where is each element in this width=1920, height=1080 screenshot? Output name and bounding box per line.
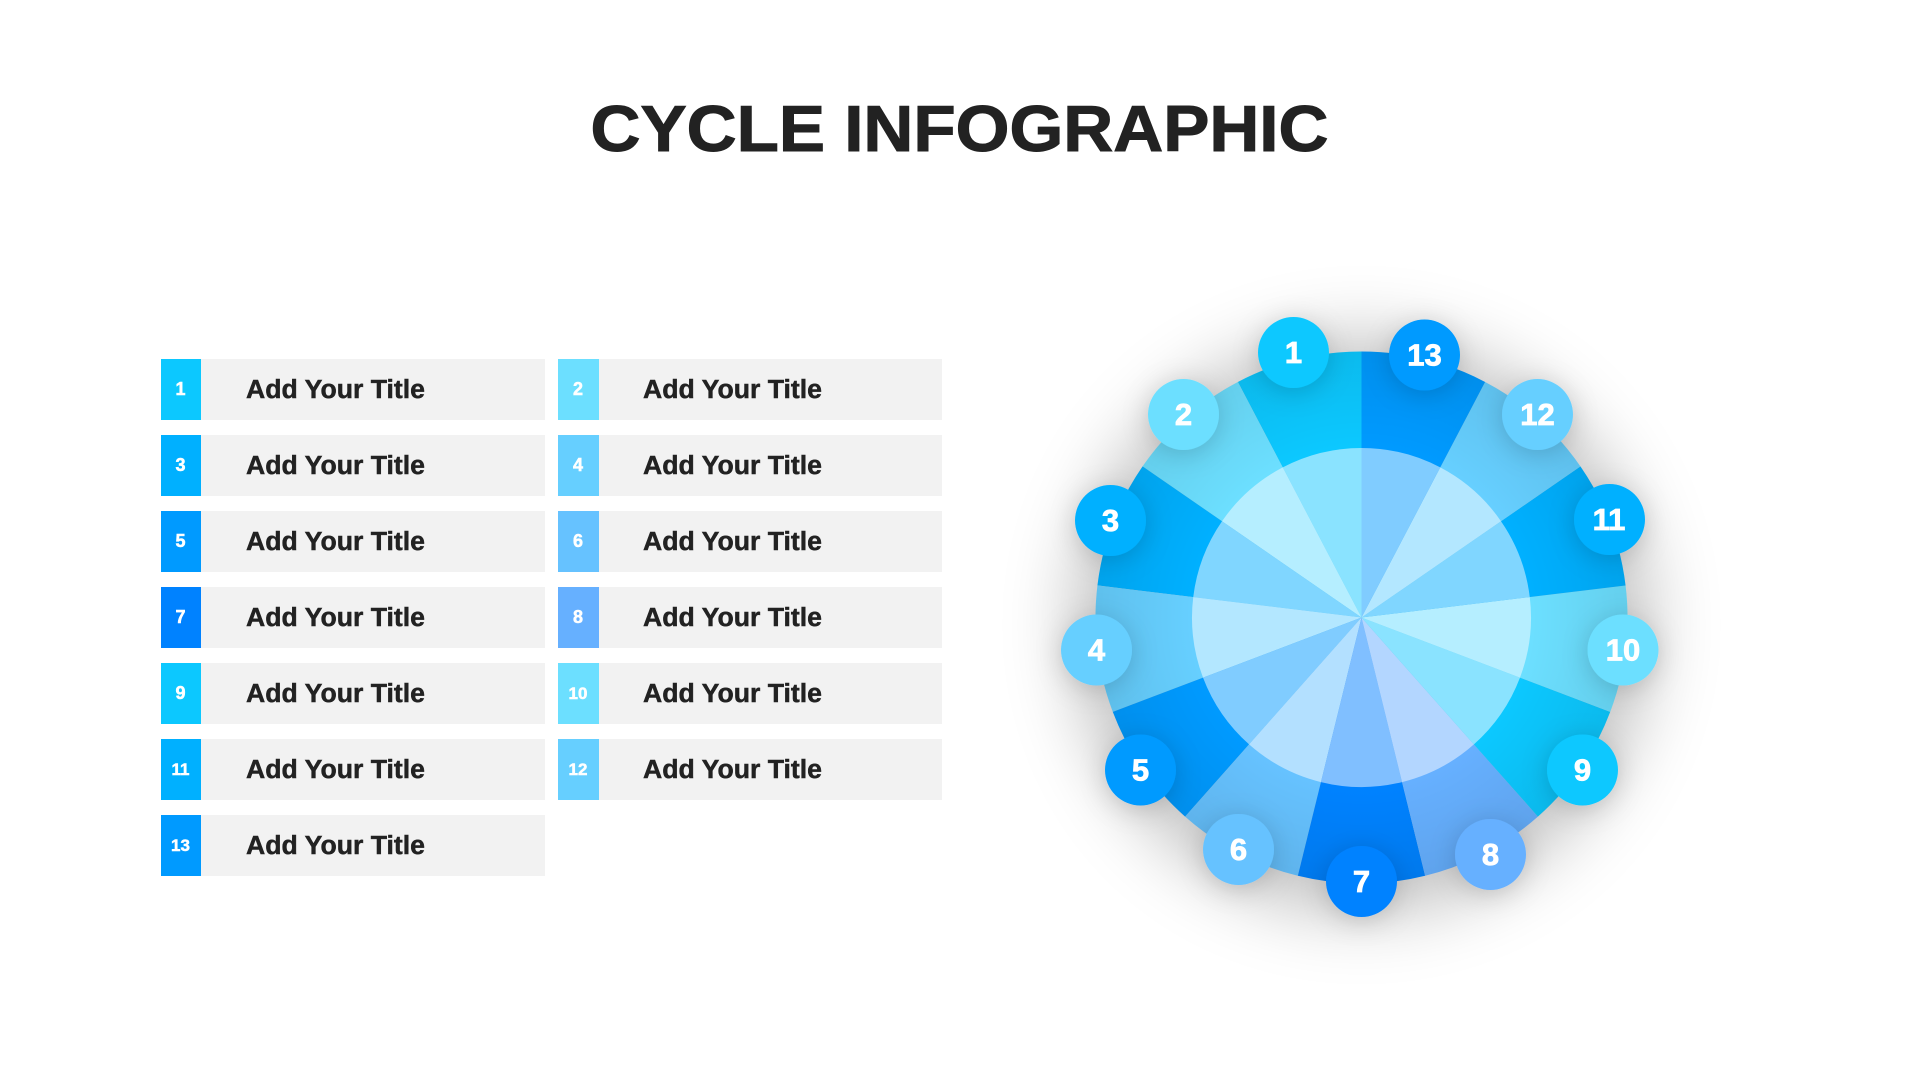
badge 5 — [1105, 734, 1176, 806]
badge 3 — [1075, 485, 1146, 556]
legend row 13: 13 — [171, 836, 190, 855]
badge 12 — [1502, 379, 1573, 450]
legend row 8 — [558, 587, 942, 648]
legend row 1: 1 — [175, 379, 186, 399]
panel: legend list — [161, 359, 942, 876]
inner ring sectors — [1177, 431, 1548, 801]
legend row 7: 7 — [175, 607, 186, 627]
legend row 7: Add Your Title — [246, 604, 425, 632]
legend row 2: 2 — [573, 379, 583, 399]
legend row 3: Add Your Title — [246, 452, 425, 480]
title: CYCLE INFOGRAPHIC — [590, 92, 1328, 165]
badge 8: 8 — [1482, 837, 1499, 872]
legend row 1: Add Your Title — [246, 376, 425, 404]
legend row 8: Add Your Title — [643, 604, 822, 632]
legend row 12: Add Your Title — [643, 756, 822, 784]
badge 2 — [1148, 379, 1219, 450]
legend row 8: 8 — [573, 607, 583, 627]
legend row 3: 3 — [175, 455, 186, 475]
badge 13: 13 — [1407, 338, 1442, 372]
legend row 5: 5 — [175, 531, 186, 551]
legend row 4 — [558, 435, 942, 496]
legend row 1 — [161, 359, 545, 420]
badge 7: 7 — [1353, 864, 1370, 899]
legend row 5 — [161, 511, 545, 572]
legend row 10 — [558, 663, 942, 724]
badge 2: 2 — [1175, 397, 1192, 432]
legend row 6 — [558, 511, 942, 572]
badge 10: 10 — [1606, 632, 1640, 668]
badge 13 — [1389, 320, 1460, 390]
wheel shadow — [1076, 340, 1646, 910]
cycle wheel — [1072, 325, 1654, 905]
badge 4: 4 — [1088, 632, 1106, 668]
legend row 11: Add Your Title — [246, 756, 425, 784]
badge 9: 9 — [1574, 752, 1591, 788]
legend row 10: Add Your Title — [643, 680, 822, 708]
badge 5: 5 — [1132, 752, 1149, 788]
legend row 11: 11 — [172, 760, 189, 779]
legend row 4: 4 — [573, 455, 583, 475]
legend row 6: Add Your Title — [643, 528, 822, 556]
badge 10 — [1588, 614, 1658, 686]
legend row 12 — [558, 739, 942, 800]
badge 11: 11 — [1593, 502, 1625, 537]
legend row 13: Add Your Title — [246, 832, 425, 860]
legend row 2 — [558, 359, 942, 420]
legend row 9: 9 — [175, 683, 186, 703]
badge 6: 6 — [1230, 832, 1247, 867]
badge 1 — [1258, 317, 1329, 388]
legend row 4: Add Your Title — [643, 452, 822, 480]
legend row 6: 6 — [573, 531, 583, 551]
legend row 13 — [161, 815, 545, 876]
badge 11 — [1574, 484, 1645, 555]
legend row 5: Add Your Title — [246, 528, 425, 556]
legend row 7 — [161, 587, 545, 648]
legend row 9 — [161, 663, 545, 724]
outer ring sectors — [1072, 325, 1654, 905]
badge 6 — [1203, 814, 1274, 885]
badge 3: 3 — [1102, 503, 1119, 538]
badge 7 — [1326, 846, 1397, 917]
badge 12: 12 — [1520, 397, 1555, 432]
legend row 11 — [161, 739, 545, 800]
badge 4 — [1061, 614, 1132, 686]
badge 9 — [1547, 734, 1618, 806]
badge 8 — [1455, 819, 1526, 890]
legend row 2: Add Your Title — [643, 376, 822, 404]
legend row 9: Add Your Title — [246, 680, 425, 708]
badge 1: 1 — [1285, 335, 1302, 370]
legend row 12: 12 — [569, 760, 587, 779]
legend row 10: 10 — [569, 684, 587, 703]
legend row 3 — [161, 435, 545, 496]
